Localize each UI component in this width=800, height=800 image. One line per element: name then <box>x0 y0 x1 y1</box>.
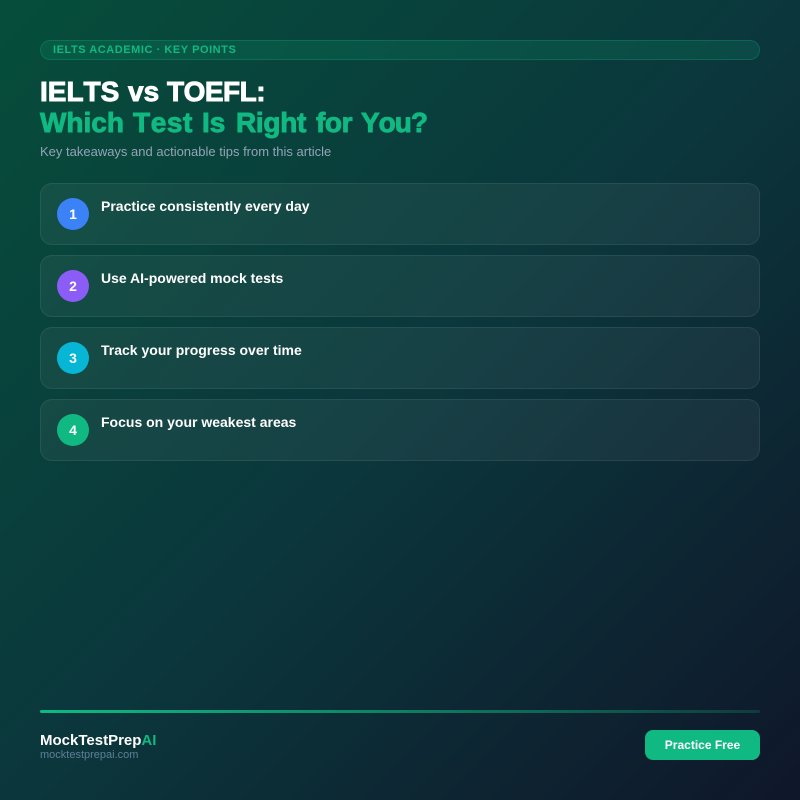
title: You? <box>361 107 427 138</box>
badge 4: 4 <box>69 422 77 438</box>
title: Test <box>133 107 193 138</box>
point 1 text: Practice consistently every day <box>101 198 310 214</box>
brand name: MockTestPrepAI <box>40 732 156 749</box>
card 3 <box>40 327 760 389</box>
card 4 <box>40 399 760 461</box>
brand url: mocktestprepai.com <box>40 749 138 761</box>
card 1 <box>40 183 760 245</box>
title: Which <box>40 107 124 138</box>
badge 3: 3 <box>69 350 77 366</box>
title: TOEFL: <box>167 76 265 107</box>
subtitle: Key takeaways and actionable tips from this article <box>40 144 331 159</box>
card 2 <box>40 255 760 317</box>
badge 2: 2 <box>69 278 77 294</box>
title: Right <box>236 107 306 138</box>
title: IELTS <box>40 76 119 107</box>
badge 3 <box>57 342 89 374</box>
brand <box>40 732 156 761</box>
title: vs <box>128 76 159 107</box>
badge 4 <box>57 414 89 446</box>
point 4 text: Focus on your weakest areas <box>101 414 296 430</box>
footer accent line <box>40 710 760 713</box>
title: for <box>316 107 352 138</box>
badge 1 <box>57 198 89 230</box>
point 2 text: Use AI-powered mock tests <box>101 270 283 286</box>
category pill <box>40 40 760 60</box>
badge 2 <box>57 270 89 302</box>
point 3 text: Track your progress over time <box>101 342 302 358</box>
badge 1: 1 <box>69 206 77 222</box>
title: Is <box>202 107 225 138</box>
category pill: IELTS ACADEMIC · KEY POINTS <box>53 44 236 56</box>
title <box>40 76 427 138</box>
cta button <box>645 730 760 760</box>
cta button: Practice Free <box>665 738 740 752</box>
